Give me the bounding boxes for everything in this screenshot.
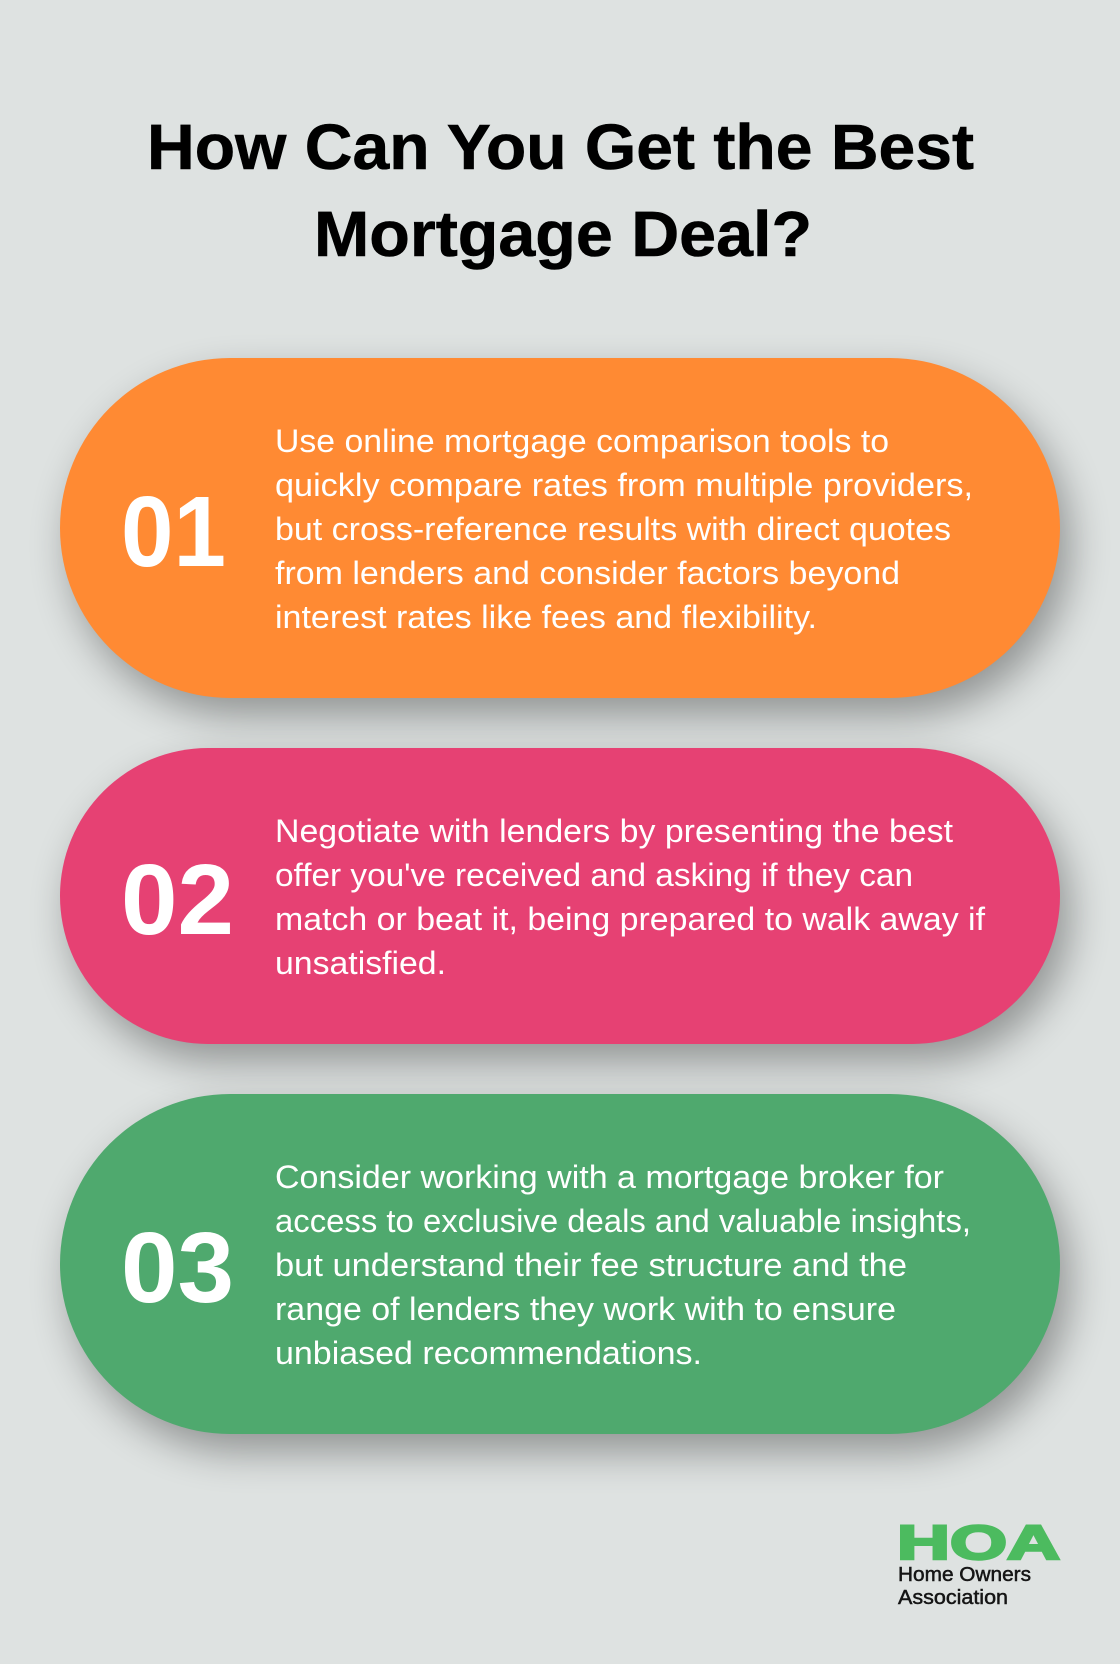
logo: Home Owners Association: HOA (897, 1517, 1060, 1570)
text block: step 01: from lenders and consider factors beyond (275, 555, 900, 591)
text block: step 03: access to exclusive deals and valuable insights, (275, 1203, 971, 1239)
text block: step 02: offer you've received and asking if they can (275, 857, 913, 893)
text block: step 02: Negotiate with lenders by presenting the best (275, 813, 953, 849)
logo: Home Owners Association: Association (898, 1587, 1008, 1609)
text block: step 03: unbiased recommendations. (275, 1335, 702, 1371)
number 02: 02 (121, 844, 234, 956)
title: Mortgage Deal? (314, 198, 812, 270)
logo: Home Owners Association (897, 1517, 1060, 1609)
text block: step 01: interest rates like fees and flexibility. (275, 599, 817, 635)
title (147, 111, 974, 270)
text block: step 03: but understand their fee structure and the (275, 1247, 907, 1283)
text block: step 03 (275, 1159, 971, 1371)
text block: step 01: but cross-reference results with direct quotes (275, 511, 951, 547)
text block: step 01: quickly compare rates from multiple providers, (275, 467, 973, 503)
text block: step 01 (275, 423, 973, 635)
text block: step 03: Consider working with a mortgage broker for (275, 1159, 944, 1195)
panel: step 02 (60, 748, 1070, 1062)
text block: step 02: unsatisfied. (275, 945, 446, 981)
text block: step 03: range of lenders they work with to ensure (275, 1291, 896, 1327)
text block: step 01: Use online mortgage comparison tools to (275, 423, 889, 459)
panel: step 01 (60, 358, 1070, 716)
title: How Can You Get the Best (147, 111, 974, 183)
number 03: 03 (121, 1212, 234, 1324)
text block: step 02 (275, 813, 985, 981)
panel: step 03 (60, 1094, 1070, 1452)
number 01: 01 (121, 476, 226, 588)
text block: step 02: match or beat it, being prepared to walk away if (275, 901, 985, 937)
logo: Home Owners Association: Home Owners (898, 1564, 1031, 1586)
